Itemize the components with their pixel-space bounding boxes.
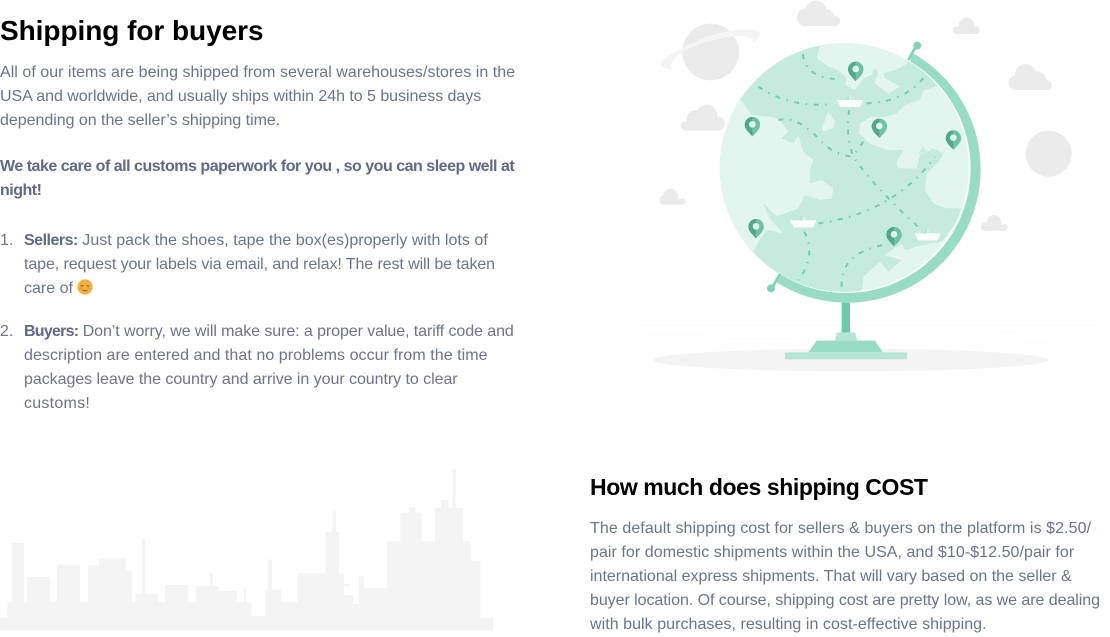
globe stand	[785, 303, 907, 359]
list item: buyers: Buyers: Don’t worry, we will make sure: a proper value, tariff code and	[24, 323, 514, 340]
list item: buyers: description are entered and that no problems occur from the time	[24, 347, 488, 364]
customs statement: We take care of all customs paperwork for you , so you can sleep well at	[0, 158, 514, 175]
globe	[720, 43, 968, 292]
heading: how much does shipping cost: How much does shipping COST	[590, 474, 928, 500]
list item: sellers: Sellers: Just pack the shoes, tape the box(es)properly with lots of	[24, 232, 488, 249]
list item: buyers: packages leave the country and arrive in your country to clear	[24, 371, 458, 388]
globe meridian ring	[767, 42, 981, 303]
cost paragraph: The default shipping cost for sellers & buyers on the platform is $2.50/	[590, 520, 1091, 537]
moon	[1026, 131, 1072, 177]
planet with ring	[661, 24, 760, 80]
intro paragraph	[0, 64, 515, 129]
list item: buyers	[0, 323, 514, 412]
ground shadow	[653, 349, 1048, 371]
customs statement: night!	[0, 182, 41, 199]
title: shipping for buyers: Shipping for buyers	[0, 15, 264, 46]
paper boats	[790, 94, 941, 240]
cost paragraph	[590, 520, 1100, 633]
light land regions	[720, 43, 968, 290]
customs statement	[0, 158, 514, 199]
clouds	[659, 1, 1052, 231]
cost paragraph: pair for domestic shipments within the USA, and $10-$12.50/pair for	[590, 544, 1074, 561]
illustration: city skyline	[0, 470, 493, 630]
intro paragraph: depending on the seller’s shipping time.	[0, 112, 280, 129]
faint sail	[918, 146, 927, 153]
list item: buyers: customs!	[24, 395, 90, 412]
cost paragraph: buyer location. Of course, shipping cost are pretty low, as we are dealing	[590, 592, 1100, 609]
shipping routes	[758, 54, 935, 287]
faint horizon lines	[640, 325, 1100, 343]
list item: sellers: care of	[24, 280, 73, 297]
list item: sellers: 1.	[0, 232, 13, 249]
map pins	[745, 62, 961, 246]
illustration: globe scene	[654, 0, 1072, 372]
cost paragraph: international express shipments. That will vary based on the seller &	[590, 568, 1072, 585]
intro paragraph: All of our items are being shipped from several warehouses/stores in the	[0, 64, 515, 81]
cost paragraph: with bulk purchases, resulting in cost-effective shipping.	[590, 616, 987, 633]
list item: sellers: tape, request your labels via email, and relax! The rest will be taken	[24, 256, 495, 273]
list item: sellers	[0, 232, 495, 297]
list item: buyers: 2.	[0, 323, 13, 340]
intro paragraph: USA and worldwide, and usually ships within 24h to 5 business days	[0, 88, 481, 105]
icon: relieved emoji	[77, 279, 93, 295]
